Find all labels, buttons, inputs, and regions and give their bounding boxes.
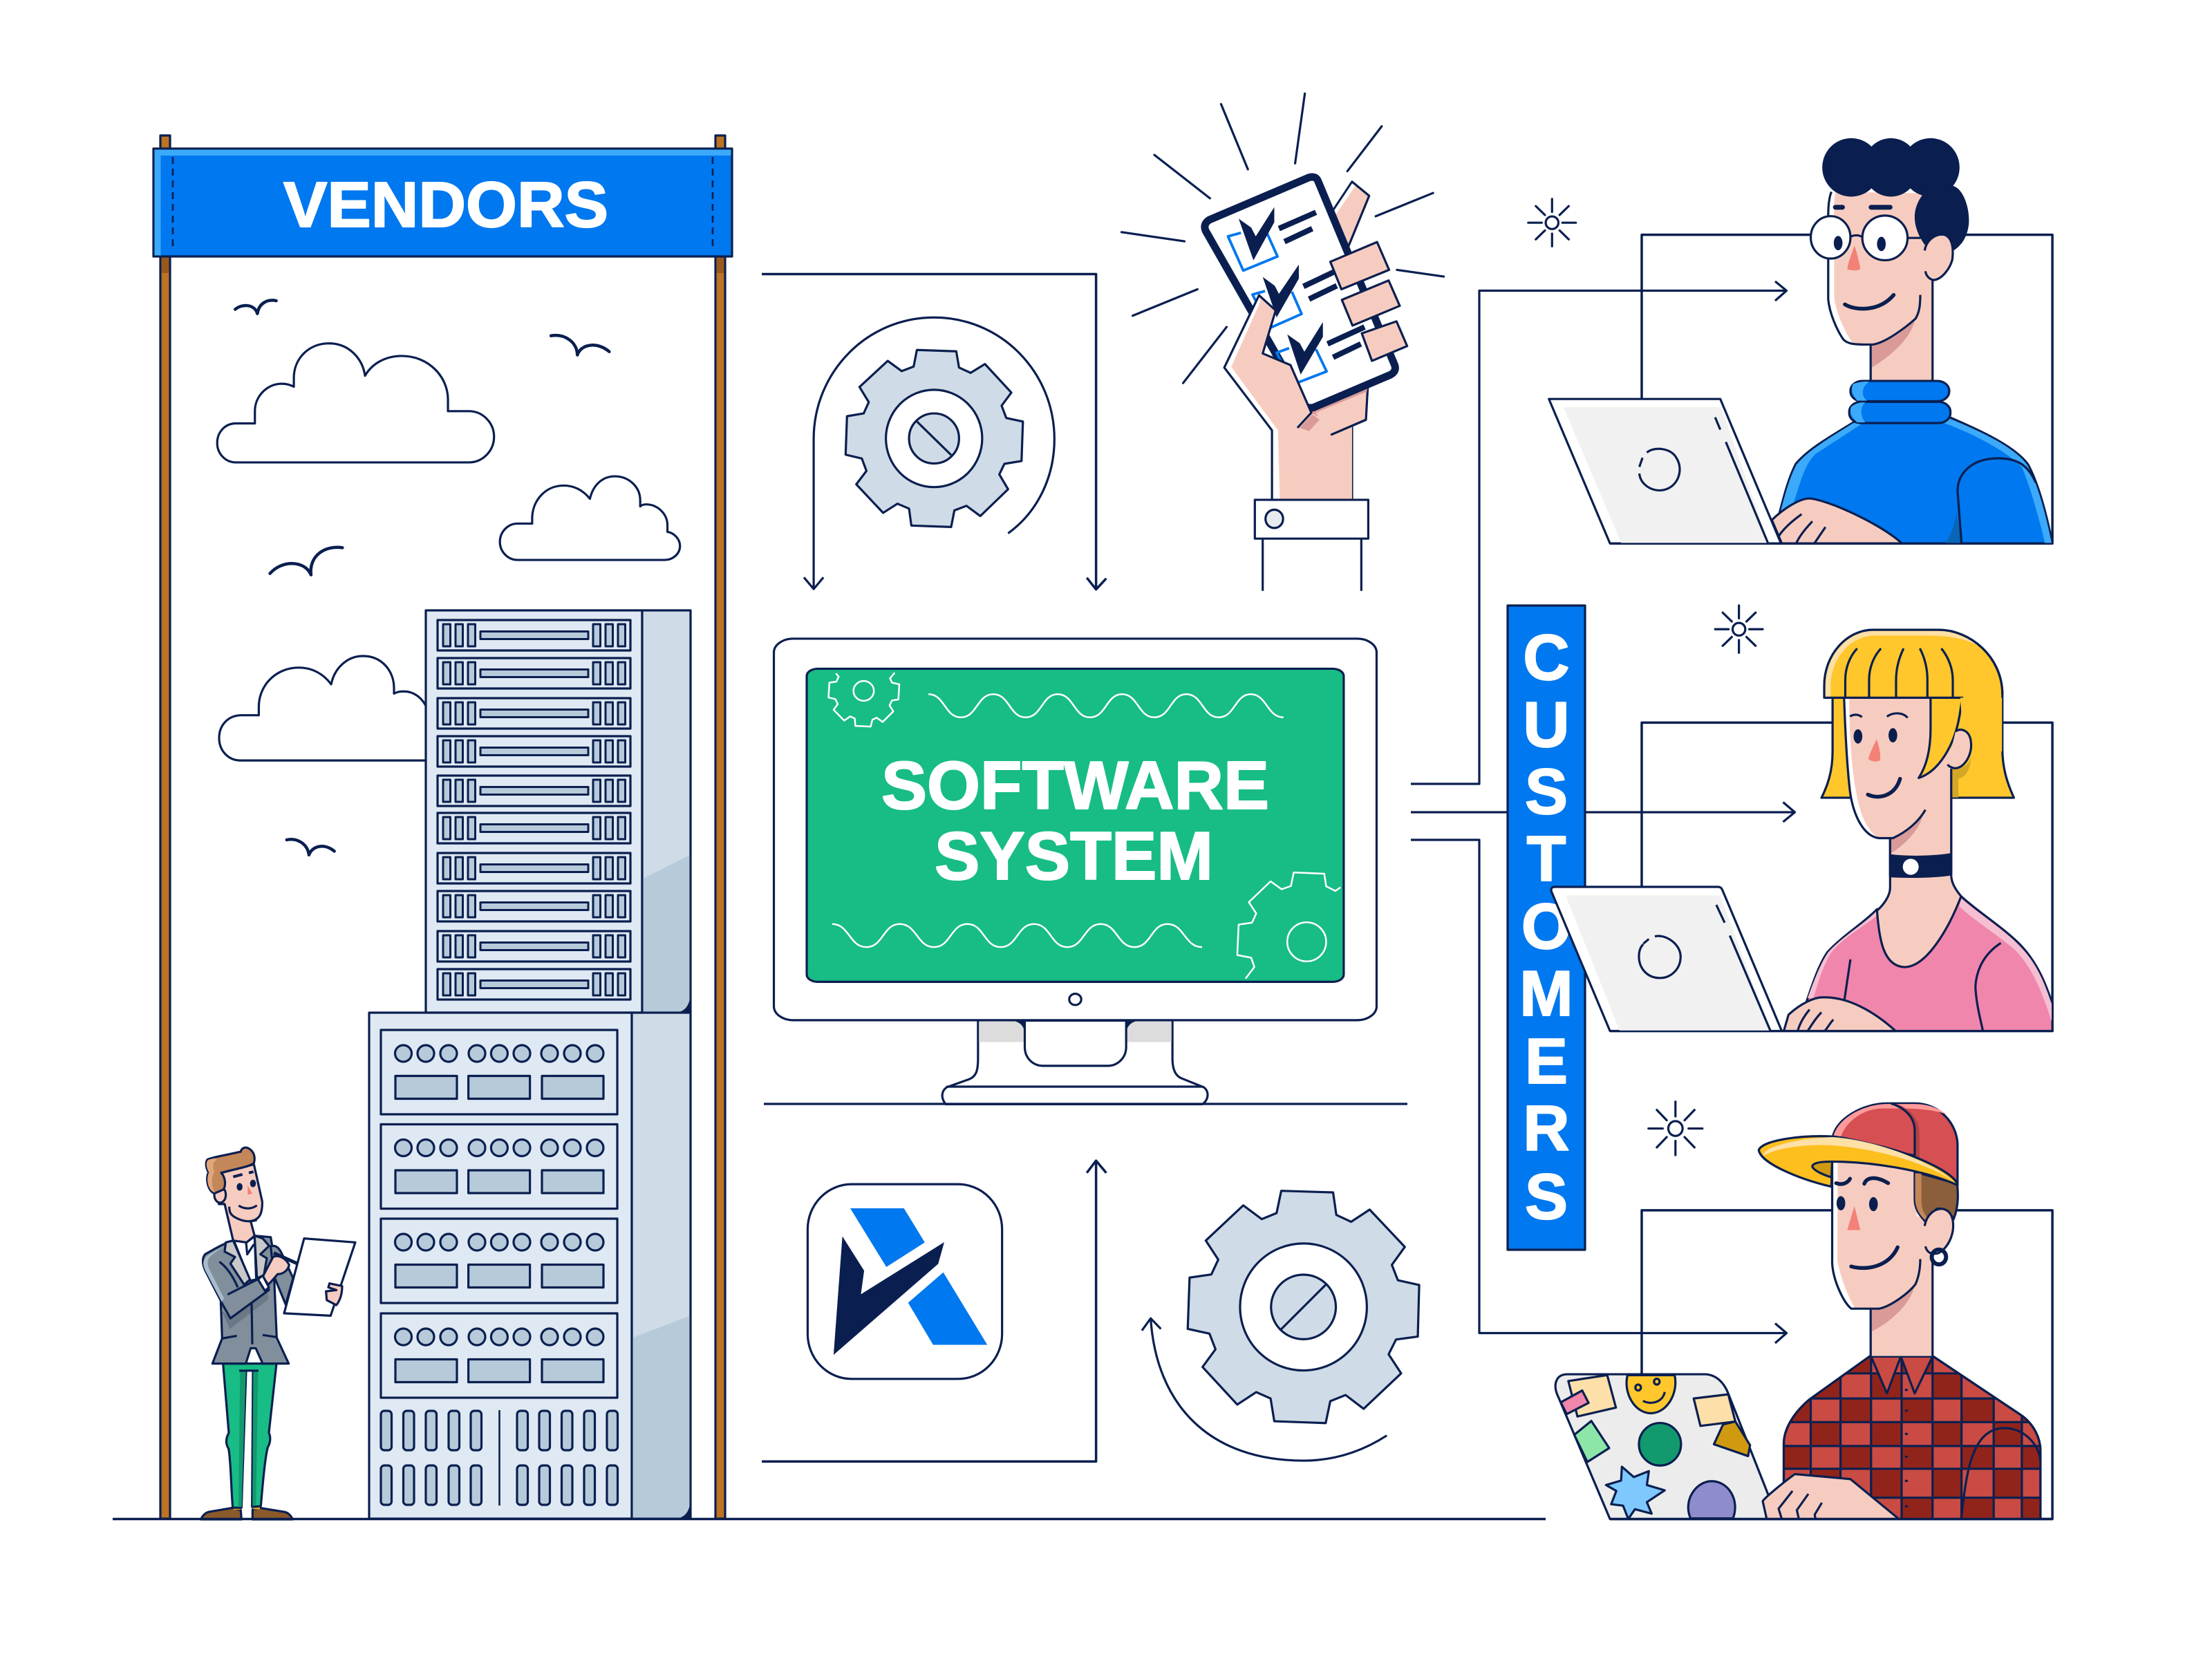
cloud small xyxy=(500,476,680,560)
facial features xyxy=(1836,1178,1888,1184)
power button xyxy=(1069,994,1081,1005)
laptop xyxy=(1549,399,1781,543)
phone xyxy=(1205,177,1395,408)
banner: vendors xyxy=(153,149,732,256)
circular arrow xyxy=(804,317,1054,589)
checkbox outlines xyxy=(1228,233,1327,384)
checklist lines xyxy=(1279,212,1365,357)
heading: software system: SYSTEM xyxy=(935,818,1213,894)
hair xyxy=(1915,1172,1958,1222)
logo app tile xyxy=(807,1184,1002,1379)
frame xyxy=(1610,235,2052,543)
heading: customers: CUSTOMERS xyxy=(1519,621,1573,1232)
check marks xyxy=(1239,207,1323,375)
heading: software system: SOFTWARE xyxy=(881,747,1269,823)
head and neck xyxy=(1831,1161,1953,1356)
monitor xyxy=(774,639,1376,1104)
cuff xyxy=(1255,500,1368,538)
plaid shirt xyxy=(1783,1356,2041,1519)
birds xyxy=(235,300,609,575)
hand xyxy=(1783,997,1895,1031)
cap xyxy=(1759,1103,1958,1187)
hair back xyxy=(1821,630,2014,798)
brows xyxy=(1835,205,1890,209)
turtleneck xyxy=(1849,402,1951,423)
sky: clouds and birds xyxy=(217,300,680,575)
hand xyxy=(1772,498,1902,543)
clipboard xyxy=(284,1239,355,1315)
neck xyxy=(1877,763,1961,967)
icon: hand holding checklist phone xyxy=(1121,93,1444,591)
gear icon xyxy=(845,350,1023,527)
laptop xyxy=(1551,887,1782,1031)
choker xyxy=(1890,854,1951,877)
sun icon xyxy=(1528,199,1576,246)
trousers xyxy=(223,1364,276,1508)
flow: vendors to software with gear and arrows xyxy=(762,274,1106,590)
shirt and lapels xyxy=(234,1237,256,1281)
cloud large xyxy=(217,344,494,462)
heading: software system xyxy=(881,747,1269,894)
sleeve lines xyxy=(1844,943,2000,1031)
ear xyxy=(1924,234,1953,280)
facial features xyxy=(1850,713,1908,718)
connector arrows to customers xyxy=(1411,281,1794,1343)
frame xyxy=(1610,722,2052,1031)
burst rays xyxy=(1121,93,1444,383)
top xyxy=(1803,897,2052,1031)
smile xyxy=(1845,295,1893,309)
writing hand xyxy=(263,1256,289,1285)
cloud and bird beside the rack xyxy=(219,656,427,855)
head xyxy=(219,1164,262,1242)
jacket xyxy=(203,1236,289,1364)
heading: vendors: VENDORS xyxy=(283,169,608,241)
server rack: upper xyxy=(426,610,691,1013)
thumb and wrist xyxy=(1224,295,1352,500)
sign posts xyxy=(160,135,725,1519)
fingers xyxy=(1330,242,1407,361)
customer 3: person with cap xyxy=(1555,1102,2052,1519)
side hair xyxy=(1919,697,1962,778)
sun icon xyxy=(1715,606,1763,653)
person: vendor with clipboard xyxy=(201,1147,355,1519)
customer 1: man with glasses xyxy=(1528,138,2052,543)
sticker laptop xyxy=(1555,1374,1778,1519)
back of hand xyxy=(1332,182,1369,252)
circular arrow xyxy=(1142,1318,1387,1461)
monitor stand xyxy=(942,1020,1208,1104)
arrow line down xyxy=(762,274,1106,590)
hair xyxy=(1822,138,1969,250)
sun icon xyxy=(1649,1102,1703,1155)
face xyxy=(1844,697,1951,855)
screen decorations xyxy=(829,673,1340,979)
earring xyxy=(1932,1250,1946,1264)
arrow line up xyxy=(762,1161,1106,1461)
nose xyxy=(1847,245,1860,270)
ground line xyxy=(113,1518,1546,1520)
head and neck xyxy=(1828,191,1952,380)
divider under monitor xyxy=(764,1103,1407,1105)
shoes xyxy=(201,1508,292,1519)
monitor frame xyxy=(774,639,1376,1020)
hair shadow xyxy=(1952,754,1971,798)
green screen xyxy=(807,668,1344,982)
banner: customers xyxy=(1508,606,1585,1250)
server rack: lower xyxy=(369,1013,691,1519)
flow: logo app icon and arrows xyxy=(762,1161,1419,1461)
ear xyxy=(1948,730,1971,768)
ear xyxy=(1924,1209,1953,1254)
customer 2: woman with blonde hair xyxy=(1551,606,2052,1031)
hand xyxy=(1763,1474,1899,1519)
large gear xyxy=(1188,1191,1419,1423)
sleeve xyxy=(221,1277,269,1318)
sweater xyxy=(1772,417,2052,543)
frame xyxy=(1610,1210,2052,1519)
glasses xyxy=(1811,216,1908,261)
fringe xyxy=(1824,630,1972,697)
